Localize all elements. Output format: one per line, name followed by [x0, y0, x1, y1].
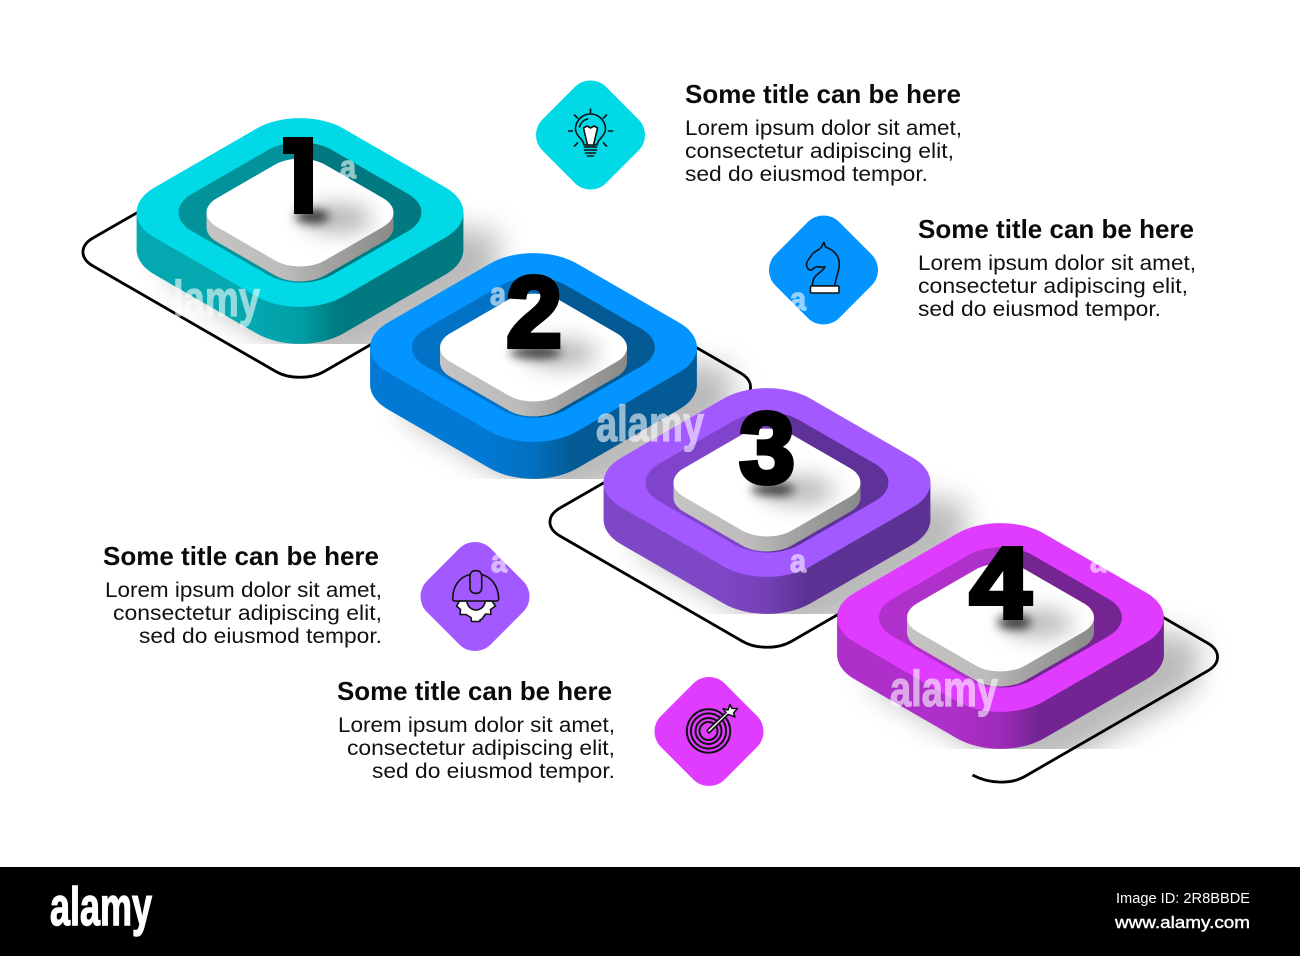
step 1 text: consectetur adipiscing elit,	[685, 139, 954, 163]
outline under block 4	[972, 604, 1218, 782]
step 3 text	[103, 541, 382, 648]
watermarks: alamy	[890, 661, 998, 717]
step 4 text: Some title can be here	[337, 676, 612, 706]
step 1 text: sed do eiusmod tempor.	[685, 162, 928, 186]
step 4 text: sed do eiusmod tempor.	[372, 759, 615, 783]
watermarks: a	[491, 543, 507, 579]
watermarks	[173, 149, 1106, 717]
step 1 text	[685, 79, 962, 186]
number 4: 4	[970, 528, 1031, 639]
step 4 text: consectetur adipiscing elit,	[347, 736, 615, 760]
outline under block 2	[674, 334, 751, 434]
watermarks: a	[1090, 543, 1106, 579]
step 1 text: Lorem ipsum dolor sit amet,	[685, 116, 962, 140]
step 3 text: consectetur adipiscing elit,	[113, 601, 382, 625]
watermarks: a	[490, 276, 506, 312]
step 4 icon: target and arrow	[645, 668, 773, 795]
step 4 text: Lorem ipsum dolor sit amet,	[338, 713, 615, 737]
step 2 text: sed do eiusmod tempor.	[918, 297, 1161, 321]
footer bar: Image ID: 2R8BBDE	[1116, 890, 1250, 907]
number 2: 2	[506, 256, 562, 368]
watermarks: a	[790, 281, 806, 317]
block 3: purple	[604, 388, 930, 614]
watermarks: a	[340, 149, 356, 185]
watermarks: a	[790, 543, 806, 579]
watermarks: alamy	[596, 396, 704, 452]
step 4 text	[337, 676, 615, 783]
block 4: magenta	[837, 523, 1164, 749]
block 2: blue	[370, 253, 697, 479]
cast shadows behind blocks	[171, 173, 1198, 767]
step 3 text: sed do eiusmod tempor.	[139, 624, 382, 648]
step 2 text: Some title can be here	[918, 214, 1194, 244]
outline under block 1	[83, 188, 390, 377]
number 1: 1	[270, 121, 326, 233]
step 2 text: Lorem ipsum dolor sit amet,	[918, 251, 1196, 275]
step 1 icon: light bulb	[527, 71, 654, 199]
step 1 text: Some title can be here	[685, 79, 961, 109]
footer bar	[0, 867, 1300, 956]
step 2 text: consectetur adipiscing elit,	[918, 274, 1188, 298]
number 3: 3	[739, 392, 795, 504]
step 2 icon: chess knight	[760, 206, 887, 334]
step 3 text: Lorem ipsum dolor sit amet,	[105, 578, 382, 602]
outline under block 3	[550, 458, 857, 647]
step 3 text: Some title can be here	[103, 541, 379, 571]
step 2 text	[918, 214, 1196, 321]
footer bar: alamy	[50, 877, 152, 937]
footer bar: www.alamy.com	[1114, 913, 1250, 932]
step 3 icon: helmet and gear	[411, 533, 539, 660]
number 1	[283, 137, 313, 214]
watermarks: lamy	[173, 271, 260, 327]
block 1: cyan	[137, 118, 463, 344]
